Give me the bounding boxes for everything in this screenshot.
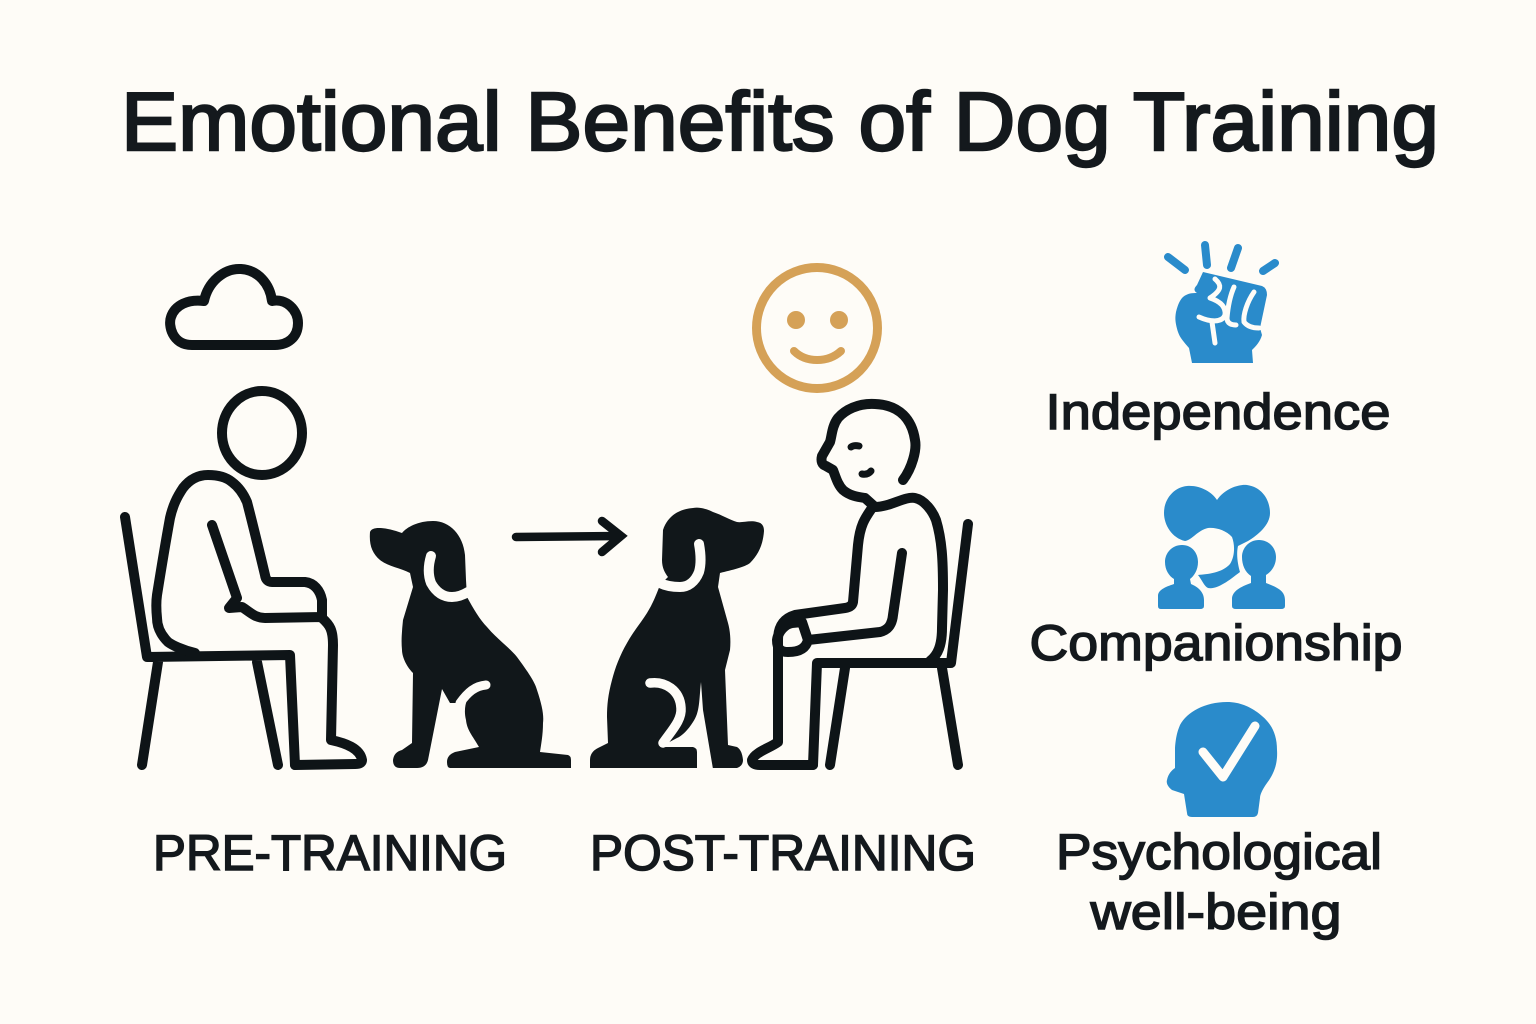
pre-training person on chair: [125, 391, 362, 765]
post-training person on chair: [752, 404, 968, 765]
icon: head with checkmark: [1167, 702, 1277, 817]
icon: cloud: [170, 269, 298, 345]
icon: independence fist: [1168, 245, 1275, 363]
heart with speech ring: [1164, 485, 1270, 588]
icon: companionship heart and people: [1158, 485, 1285, 609]
post-training dog: [590, 508, 764, 769]
label: psychological well-being: [1056, 824, 1382, 940]
arrow: [516, 521, 621, 552]
face: [851, 446, 871, 474]
icon: smiley face: [756, 268, 878, 388]
fist: [1175, 272, 1267, 363]
label: independence: Independence: [1046, 384, 1390, 440]
body: [156, 475, 362, 765]
label: psychological well-being: well-being: [1089, 884, 1342, 940]
chair: [125, 517, 295, 765]
left person: [1158, 545, 1204, 609]
body: [752, 498, 943, 765]
finger lines: [1199, 279, 1259, 343]
title: Emotional Benefits of Dog Training: [121, 75, 1439, 168]
label: companionship: Companionship: [1030, 615, 1402, 671]
head: [822, 404, 915, 507]
rays: [1168, 245, 1275, 271]
chair: [813, 524, 968, 765]
label: post-training: POST-TRAINING: [590, 825, 976, 881]
label: pre-training: PRE-TRAINING: [153, 825, 507, 881]
right person: [1232, 540, 1285, 609]
head: [222, 391, 302, 475]
pre-training dog: [370, 521, 571, 768]
label: psychological well-being: Psychological: [1056, 824, 1382, 880]
